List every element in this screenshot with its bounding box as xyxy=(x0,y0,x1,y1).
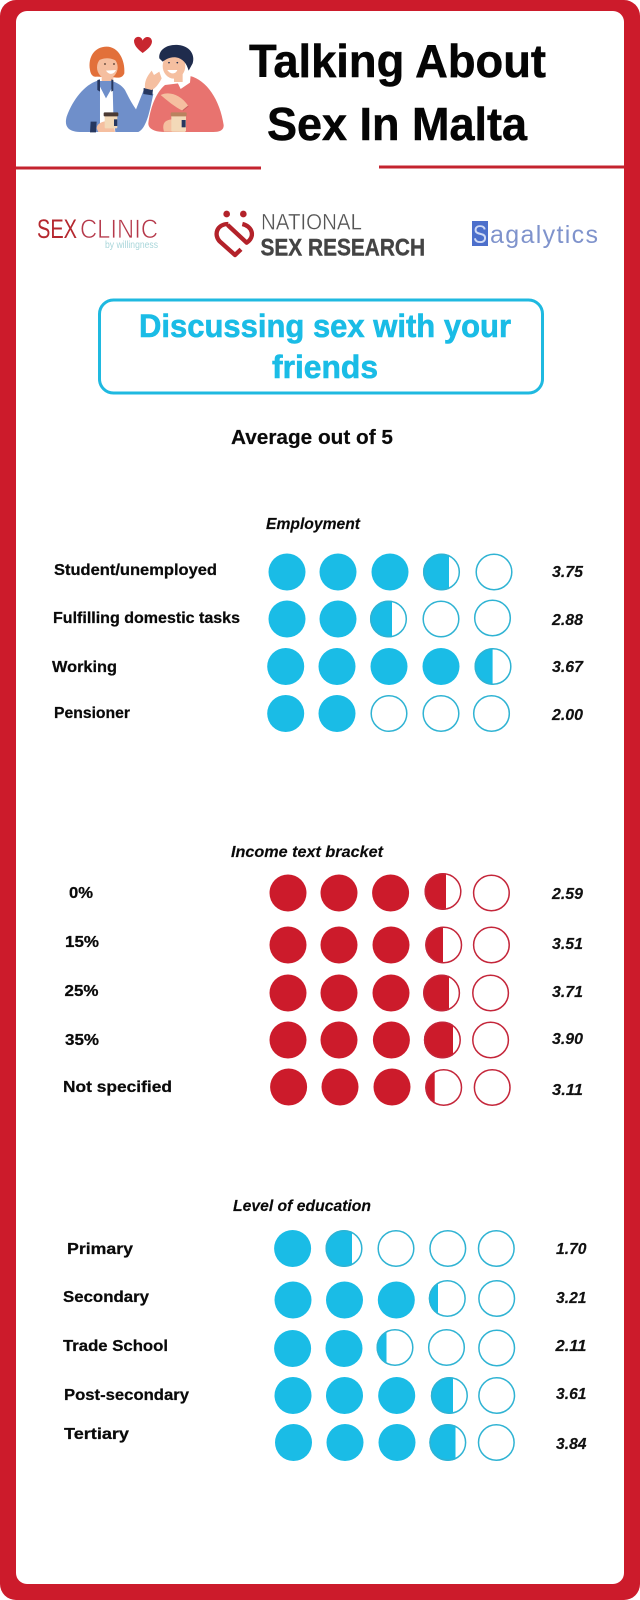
row: fulfilling domestic tasks 2.88: 2.88 xyxy=(551,612,583,629)
illustration: couple talking with heart xyxy=(66,37,224,132)
logo: National Sex Research: SEX RESEARCH xyxy=(260,235,425,262)
row: fulfilling domestic tasks 2.88: Fulfilling domestic tasks xyxy=(53,610,240,627)
row: tertiary 3.84 xyxy=(64,1422,587,1463)
row: trade school 2.11: 2.11 xyxy=(554,1338,587,1355)
row: primary 1.70: Primary xyxy=(67,1241,133,1258)
icon: heart with two dots xyxy=(217,211,252,255)
row: student/unemployed 3.75: 3.75 xyxy=(552,564,584,581)
row: fulfilling domestic tasks 2.88 xyxy=(53,599,583,639)
row: 15% 3.51 xyxy=(65,925,583,966)
row: 15% 3.51: 3.51 xyxy=(552,936,583,953)
row: not specified 3.11 xyxy=(63,1067,583,1108)
row: 0% 2.59: 0% xyxy=(69,885,93,902)
row: pensioner 2.00: Pensioner xyxy=(54,705,130,722)
heading: level of education: Level of education xyxy=(233,1198,371,1215)
row: not specified 3.11: 3.11 xyxy=(552,1082,583,1099)
row: not specified 3.11: Not specified xyxy=(63,1079,172,1096)
row: working 3.67: 3.67 xyxy=(552,659,584,676)
row: pensioner 2.00 xyxy=(54,695,583,732)
row: secondary 3.21: 3.21 xyxy=(556,1290,587,1307)
logo: Sagalytics: S xyxy=(473,221,487,249)
logo: National Sex Research xyxy=(217,210,425,262)
title: Talking About xyxy=(249,35,546,87)
subheading: average out of 5: Average out of 5 xyxy=(231,427,393,449)
row: 35% 3.90 xyxy=(65,1020,583,1061)
heading: income text bracket: Income text bracket xyxy=(231,844,384,861)
logo: Sagalytics: agalytics xyxy=(490,221,598,249)
logo: Sex Clinic: by willingness xyxy=(105,239,158,251)
heading: employment: Employment xyxy=(266,516,361,533)
row: tertiary 3.84: Tertiary xyxy=(64,1426,129,1443)
logo: National Sex Research: NATIONAL xyxy=(261,210,362,234)
title: Sex In Malta xyxy=(267,98,527,150)
heading box: Discussing sex with your friends: Discussing sex with your xyxy=(139,308,511,344)
row: 25% 3.71: 3.71 xyxy=(552,984,583,1001)
row: tertiary 3.84: 3.84 xyxy=(556,1436,587,1453)
logo: Sex Clinic: SEX xyxy=(37,214,77,244)
row: 35% 3.90: 3.90 xyxy=(552,1031,583,1048)
row: primary 1.70 xyxy=(67,1228,587,1269)
row: 25% 3.71: 25% xyxy=(64,983,99,1000)
heading box: Discussing sex with your friends xyxy=(100,300,542,393)
row: student/unemployed 3.75 xyxy=(54,552,584,592)
row: working 3.67: Working xyxy=(52,659,117,676)
heading box: Discussing sex with your friends: friends xyxy=(272,349,378,385)
row: primary 1.70: 1.70 xyxy=(556,1241,587,1258)
row: post-secondary 3.61: Post-secondary xyxy=(64,1387,189,1404)
row: trade school 2.11: Trade School xyxy=(63,1338,168,1355)
title xyxy=(249,35,546,150)
row: 0% 2.59 xyxy=(69,871,583,912)
panel: employment xyxy=(52,516,584,732)
row: post-secondary 3.61 xyxy=(64,1375,587,1416)
row: 15% 3.51: 15% xyxy=(65,934,99,951)
row: secondary 3.21: Secondary xyxy=(63,1289,149,1306)
row: secondary 3.21 xyxy=(63,1278,587,1319)
logo: Sex Clinic xyxy=(37,214,158,251)
row: student/unemployed 3.75: Student/unemployed xyxy=(54,562,217,579)
row: 35% 3.90: 35% xyxy=(65,1032,99,1049)
panel: level of education xyxy=(63,1198,587,1463)
logo: Sex Clinic: CLINIC xyxy=(80,214,158,244)
row: 0% 2.59: 2.59 xyxy=(551,886,583,903)
row: trade school 2.11 xyxy=(63,1327,587,1368)
panel: income tax bracket xyxy=(63,844,583,1108)
row: post-secondary 3.61: 3.61 xyxy=(556,1386,587,1403)
row: working 3.67 xyxy=(52,646,584,687)
row: pensioner 2.00: 2.00 xyxy=(551,707,583,724)
row: 25% 3.71 xyxy=(64,973,583,1014)
